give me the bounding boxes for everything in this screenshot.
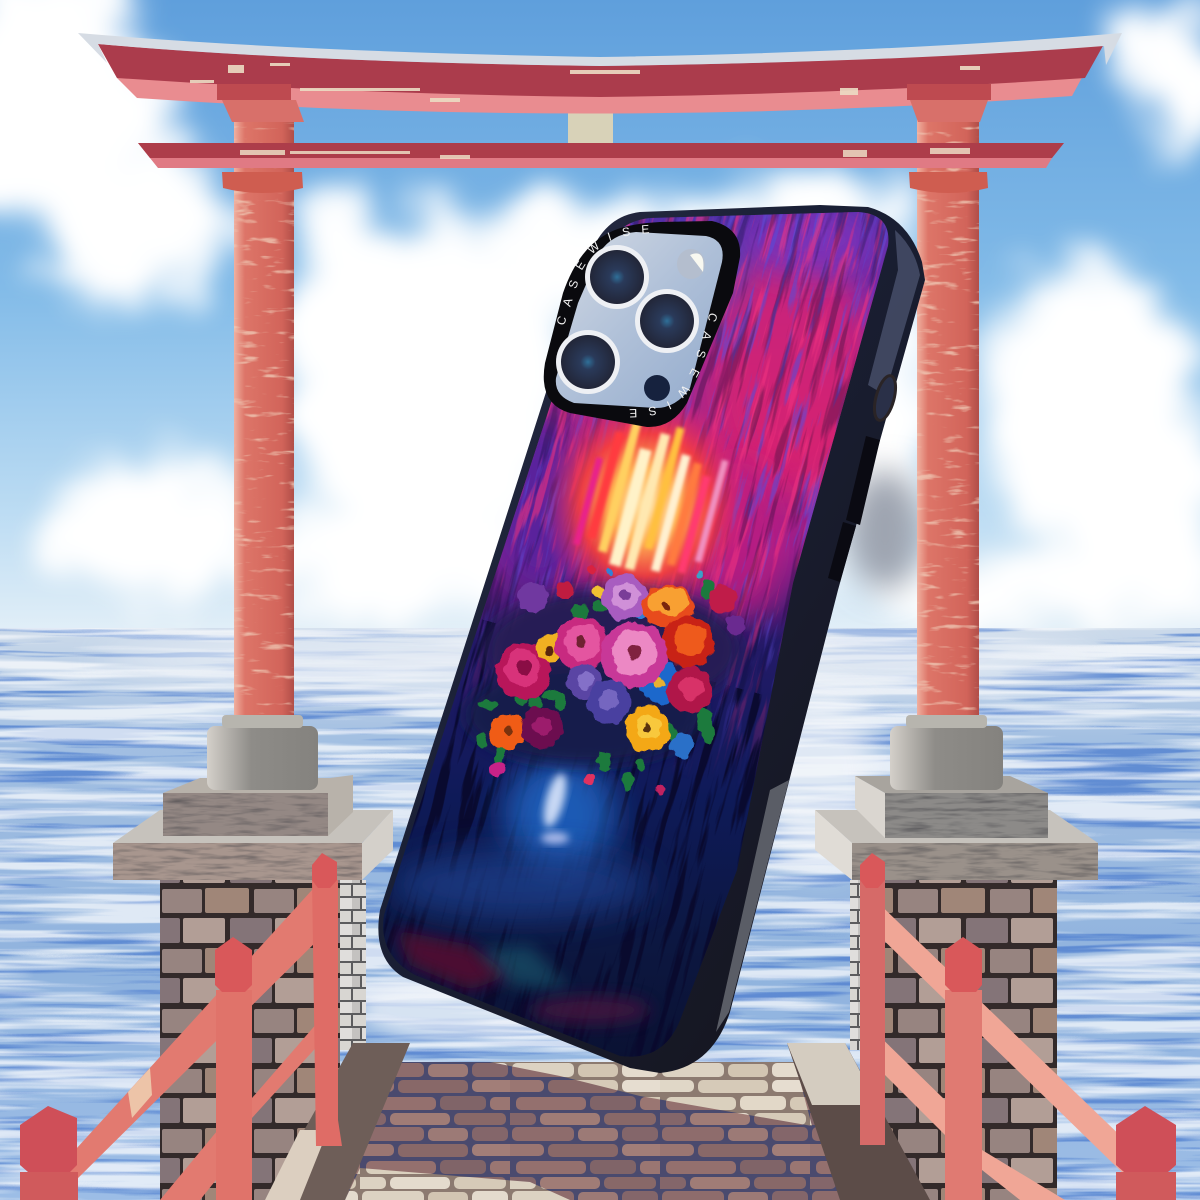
rose: lilac top xyxy=(602,574,648,620)
right pillar xyxy=(917,110,979,720)
lidar sensor xyxy=(644,375,670,401)
left railing xyxy=(20,853,342,1200)
sky background with clouds xyxy=(0,0,1200,640)
case body xyxy=(378,205,925,1073)
left stone base xyxy=(113,715,393,1200)
flower: yellow small xyxy=(536,632,560,662)
pillar caps xyxy=(217,84,991,122)
right stone base xyxy=(815,715,1098,1200)
stone walkway xyxy=(265,1043,930,1200)
brush streak texture xyxy=(384,212,888,1056)
lower crossbeam xyxy=(138,143,1064,168)
central light glow xyxy=(542,405,747,601)
flower: golden yellow xyxy=(625,706,671,752)
sea with ripples xyxy=(0,624,1200,1200)
rose: dark plum xyxy=(521,706,563,748)
water reflection xyxy=(390,757,650,1024)
left kerb xyxy=(265,1043,410,1200)
glossy side reflections xyxy=(716,230,920,1032)
right railing xyxy=(860,853,1176,1200)
phone case xyxy=(378,205,925,1073)
pillar collars xyxy=(222,172,988,193)
small accent blooms xyxy=(490,566,745,795)
lens: lower xyxy=(556,330,620,394)
lens: right xyxy=(635,289,699,353)
camera ring xyxy=(544,221,740,427)
peony: large pink xyxy=(601,622,667,688)
rose: purple large xyxy=(587,680,631,724)
torii gate xyxy=(78,33,1122,720)
brand text upper ring: CASEWISE xyxy=(557,224,650,324)
upper roof beam xyxy=(78,33,1122,114)
flower: blue xyxy=(638,662,677,706)
rose: crimson right xyxy=(667,667,713,713)
flower: orange xyxy=(490,713,526,749)
centre strut xyxy=(568,105,613,145)
flower bouquet xyxy=(477,566,745,795)
rose: crimson left xyxy=(496,643,552,699)
flower: orange top xyxy=(642,585,694,629)
lens: top xyxy=(585,245,649,309)
peony: pink left xyxy=(555,617,609,671)
bouquet backdrop xyxy=(465,588,740,765)
flash xyxy=(677,249,705,279)
side buttons xyxy=(828,373,900,582)
rose: red orange xyxy=(662,616,714,668)
left pillar xyxy=(234,110,294,720)
rose: purple small xyxy=(567,664,603,700)
painted artwork xyxy=(383,212,888,1056)
foliage xyxy=(477,581,715,789)
right kerb xyxy=(787,1043,930,1200)
brand text lower ring: CASEWISE xyxy=(630,314,717,418)
